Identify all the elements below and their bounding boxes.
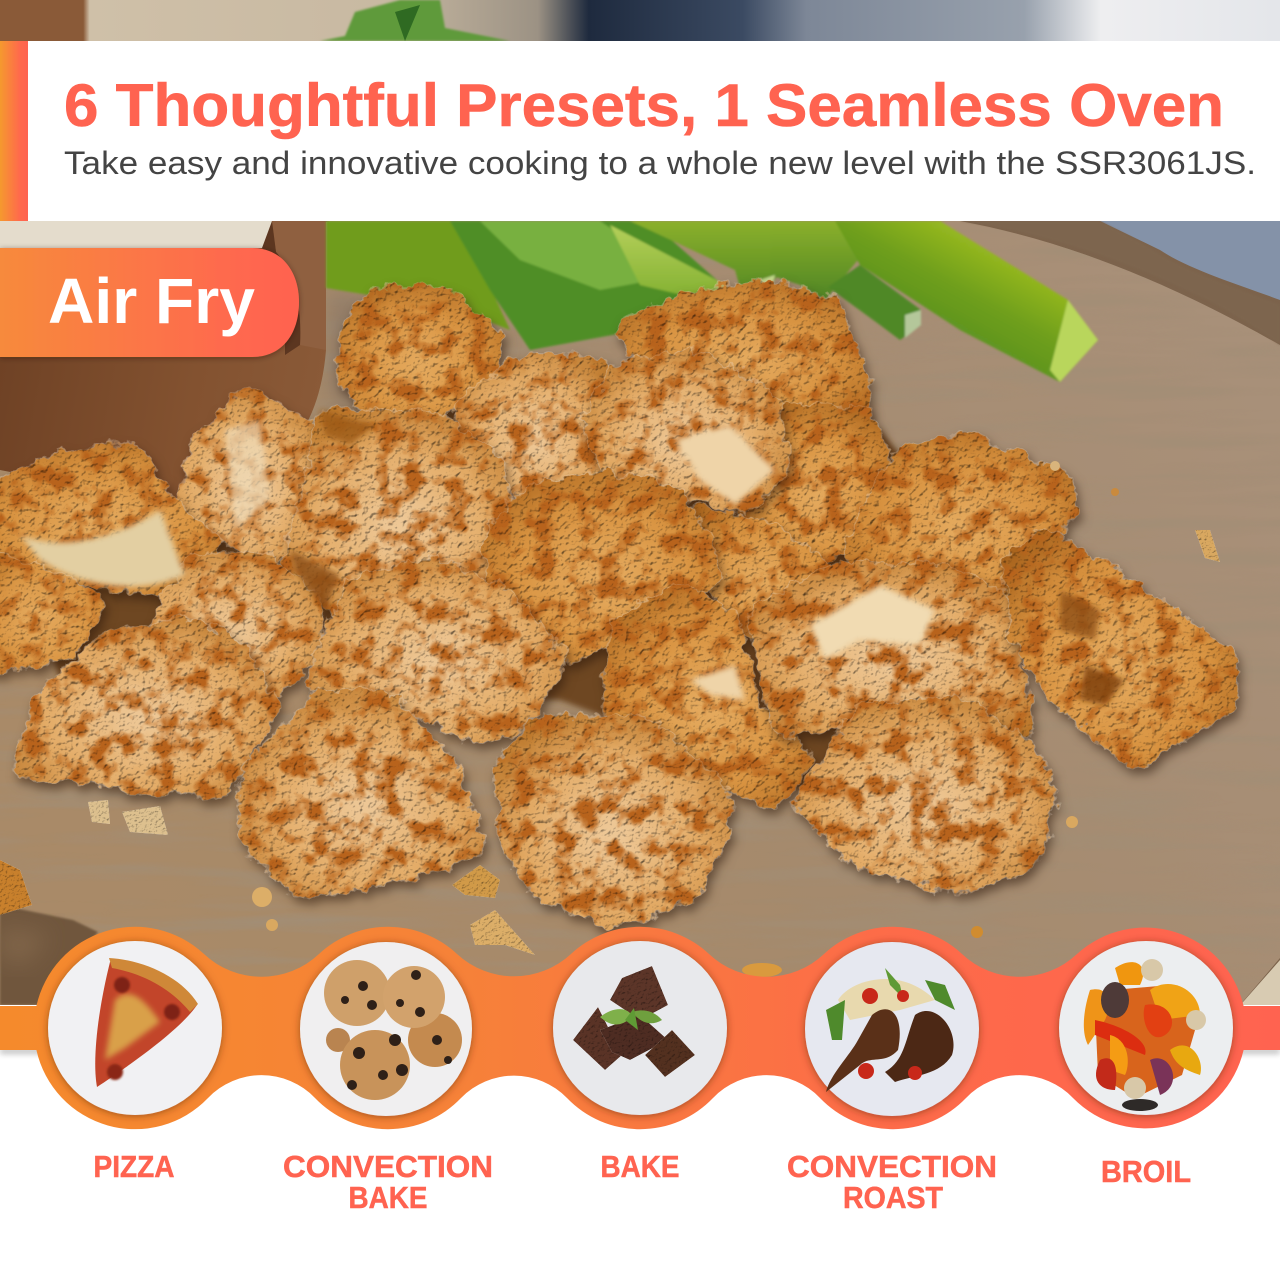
header accent bar [0, 41, 28, 221]
fried food pile [0, 280, 1238, 977]
celery sticks [326, 221, 1098, 382]
header panel [0, 41, 1280, 221]
title: 6 Thoughtful Presets, 1 Seamless Oven [64, 72, 1224, 139]
label: bake: BAKE [600, 1149, 680, 1184]
label: convection roast: CONVECTION [787, 1149, 997, 1184]
label: convection bake: BAKE [348, 1180, 428, 1215]
wooden board [0, 221, 1280, 1005]
label: convection roast [787, 1149, 997, 1215]
subtitle: Take easy and innovative cooking to a whole new level with the SSR3061JS. [64, 145, 1256, 181]
preset: broil vegetables plate [1059, 941, 1233, 1115]
label: convection bake [283, 1149, 493, 1215]
label: broil: BROIL [1101, 1154, 1191, 1189]
scalloped preset band [0, 927, 1280, 1129]
preset: pizza plate [48, 941, 222, 1115]
label: convection roast: ROAST [843, 1180, 943, 1215]
badge: air fry [0, 248, 299, 357]
white lower background [0, 1005, 1280, 1280]
preset: convection bake cookies plate [300, 942, 472, 1116]
parsley behind header [320, 0, 510, 41]
background photo: top strip and table [0, 0, 1280, 1011]
preset: convection roast duck plate [805, 942, 979, 1116]
wooden bowl with dip [0, 221, 326, 505]
label: convection bake: CONVECTION [283, 1149, 493, 1184]
preset: bake brownies plate [553, 941, 727, 1115]
badge: air fry: Air Fry [48, 265, 255, 337]
label: pizza: PIZZA [94, 1149, 174, 1184]
